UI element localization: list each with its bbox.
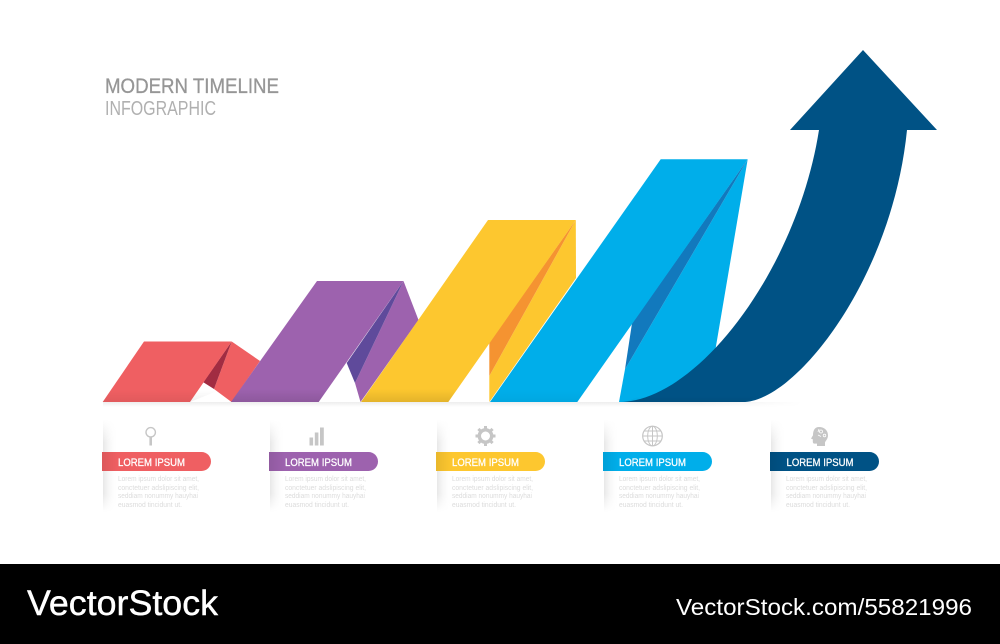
body text: seddiam nonummy hauyhai [285, 493, 365, 500]
body text [619, 476, 700, 509]
icon: magnifier [146, 428, 155, 446]
step card 5 [770, 420, 879, 512]
body text: seddiam nonummy hauyhai [619, 493, 699, 500]
card shade [103, 420, 118, 512]
label pill: LOREM IPSUM [786, 457, 854, 469]
icon: gear [476, 426, 496, 446]
body text [786, 476, 867, 509]
body text [452, 476, 533, 509]
body text: Lorem ipsum dolor sit amet, [452, 476, 533, 483]
subheading: infographic: INFOGRAPHIC [105, 98, 216, 120]
body text: Lorem ipsum dolor sit amet, [118, 476, 199, 483]
body text: Lorem ipsum dolor sit amet, [285, 476, 366, 483]
body text: Lorem ipsum dolor sit amet, [786, 476, 867, 483]
step card 1 [102, 420, 211, 512]
title [105, 74, 279, 120]
step 4: blue ribbon [490, 159, 748, 402]
body text: euasmod tincidunt ut. [118, 502, 182, 509]
body text [118, 476, 199, 509]
step 2: purple ribbon [231, 281, 418, 402]
step 1: red ribbon [103, 342, 260, 402]
card shade [270, 420, 285, 512]
step 3: yellow ribbon [361, 220, 576, 402]
label pill: LOREM IPSUM [285, 457, 352, 469]
floor shadow [103, 402, 803, 407]
footer image id: VectorStock.com/55821996 [676, 594, 972, 620]
body text: conctetuer adslipiscing elit, [118, 485, 199, 492]
body text: euasmod tincidunt ut. [786, 502, 850, 509]
ribbon arrow chart [103, 50, 937, 402]
card shade [771, 420, 786, 512]
body text: Lorem ipsum dolor sit amet, [619, 476, 700, 483]
label pill: LOREM IPSUM [619, 457, 686, 469]
icon: bar chart [310, 428, 324, 446]
body text: euasmod tincidunt ut. [452, 502, 516, 509]
step 5: navy arrow [619, 50, 937, 402]
card shade [604, 420, 619, 512]
footer logo text: VectorStock [27, 584, 219, 623]
step card 4 [603, 420, 712, 512]
card shade [437, 420, 452, 512]
step card 3 [436, 420, 545, 512]
body text [285, 476, 366, 509]
body text: euasmod tincidunt ut. [285, 502, 349, 509]
body text: seddiam nonummy hauyhai [118, 493, 198, 500]
heading: modern timeline: MODERN TIMELINE [105, 74, 279, 98]
label pill: LOREM IPSUM [452, 457, 519, 469]
body text: seddiam nonummy hauyhai [786, 493, 866, 500]
body text: conctetuer adslipiscing elit, [786, 485, 867, 492]
footer bar [0, 564, 1000, 644]
label pill: LOREM IPSUM [118, 457, 185, 469]
icon: globe [643, 426, 662, 446]
body text: conctetuer adslipiscing elit, [619, 485, 700, 492]
body text: conctetuer adslipiscing elit, [285, 485, 366, 492]
step card 2 [269, 420, 378, 512]
body text: seddiam nonummy hauyhai [452, 493, 532, 500]
icon: head with gears [811, 427, 828, 446]
ribbon base shading [103, 389, 760, 402]
body text: euasmod tincidunt ut. [619, 502, 683, 509]
body text: conctetuer adslipiscing elit, [452, 485, 533, 492]
